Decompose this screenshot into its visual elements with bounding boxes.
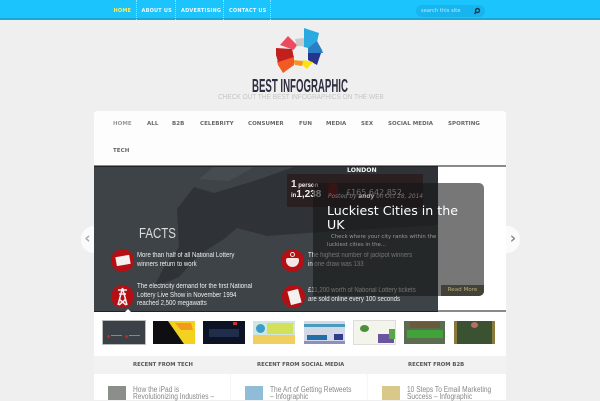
category navigation panel: SEX xyxy=(361,120,373,126)
logo icon xyxy=(276,28,323,73)
map shapes xyxy=(155,167,438,286)
icon: magnifier xyxy=(474,8,480,14)
read more button xyxy=(441,285,484,296)
stat text: 1 person xyxy=(291,179,318,190)
fact text three: in one draw was 133 xyxy=(308,260,364,268)
thumbnails panel xyxy=(94,312,506,400)
thumbnail 7 xyxy=(404,321,445,344)
thumbnail 8 xyxy=(454,321,495,344)
tagline: CHECK OUT THE BEST INFOGRAPHICS ON THE WEB xyxy=(218,92,384,100)
fact text three xyxy=(308,252,412,268)
top navigation bar: CONTACT US xyxy=(229,8,266,14)
recent post 3: 10 Steps To Email Marketing xyxy=(407,385,491,394)
fact text two: reached 2,500 megawatts xyxy=(137,300,207,307)
category navigation panel: HOME xyxy=(113,120,132,126)
category navigation panel: SOCIAL MEDIA xyxy=(388,120,433,126)
fact text one: More than half of all National Lottery xyxy=(137,252,234,259)
search box xyxy=(416,5,485,17)
thumbnail 3 xyxy=(203,321,245,344)
heading: facts: FACTS xyxy=(139,226,176,242)
fact icon: winners xyxy=(281,249,304,272)
post title: Luckiest Cities in the UK xyxy=(327,203,458,232)
thumbnail 2 xyxy=(153,321,195,344)
category navigation panel: MEDIA xyxy=(326,120,346,126)
top navigation bar xyxy=(0,0,600,20)
post excerpt: Check where your city ranks within the luckiest cities in the... xyxy=(327,234,436,248)
caption overlay panel xyxy=(313,183,484,296)
fact text two xyxy=(137,283,252,307)
recent post 1: How the iPad is xyxy=(133,385,179,394)
site title: BEST INFOGRAPHIC xyxy=(252,76,348,96)
thumbnail 6 xyxy=(354,321,395,344)
recent posts header band xyxy=(94,356,506,374)
top navigation bar: ABOUT US xyxy=(142,8,172,14)
fact text three: The highest number of jackpot winners xyxy=(308,252,412,259)
post meta: Posted by andy on Oct 28, 2014 xyxy=(328,194,423,200)
active marker xyxy=(124,309,132,313)
stat text two: in1,238 xyxy=(291,189,321,200)
previous arrow: ‹ xyxy=(84,229,91,247)
category navigation panel xyxy=(94,111,506,165)
thumbnail 1 xyxy=(103,321,145,344)
icon: red figure xyxy=(328,183,338,197)
thumbnail 4 xyxy=(253,321,295,344)
recent post 1 xyxy=(108,385,214,401)
top navigation bar: ADVERTISING xyxy=(181,8,221,14)
fact text four: £11,200 worth of National Lottery tickets xyxy=(308,287,416,294)
read more button: Read More xyxy=(448,287,477,293)
fact text four: are sold online every 100 seconds xyxy=(308,296,400,302)
search box: search this site xyxy=(421,8,461,14)
thumbnail 5 xyxy=(304,321,345,344)
category navigation panel: ALL xyxy=(147,120,158,126)
fact icon: briefcase xyxy=(111,249,134,272)
stat box xyxy=(287,174,423,207)
fact text four xyxy=(308,287,416,302)
recent posts header band: RECENT FROM SOCIAL MEDIA xyxy=(257,362,344,368)
category navigation panel: SPORTING xyxy=(448,120,480,126)
fact text one xyxy=(137,252,234,268)
recent posts header band: RECENT FROM TECH xyxy=(133,362,193,368)
category navigation panel: FUN xyxy=(299,120,312,126)
fact icon: tickets xyxy=(282,285,305,308)
recent posts header band: RECENT FROM B2B xyxy=(408,362,464,368)
fact text one: winners return to work xyxy=(137,260,197,268)
fact icon: pylon xyxy=(111,285,134,308)
category navigation panel: TECH xyxy=(113,148,129,154)
recent post 2 xyxy=(245,385,352,401)
jackpot figure: £165,642,852 xyxy=(346,188,402,197)
next arrow: › xyxy=(510,229,516,247)
previous arrow xyxy=(81,226,94,253)
featured map image xyxy=(94,166,438,312)
recent post 3 xyxy=(382,385,491,401)
category navigation panel: CONSUMER xyxy=(248,120,284,126)
recent post 2: The Art of Getting Retweets xyxy=(270,385,351,394)
slider area xyxy=(94,165,506,312)
top navigation bar: HOME xyxy=(114,8,131,14)
fact text two: Lottery Live Show in November 1994 xyxy=(137,292,236,298)
fact text two: The electricity demand for the first National xyxy=(137,283,252,290)
city label: LONDON xyxy=(347,167,377,174)
next arrow xyxy=(506,226,520,253)
category navigation panel: CELEBRITY xyxy=(200,120,234,126)
category navigation panel: B2B xyxy=(172,120,184,126)
